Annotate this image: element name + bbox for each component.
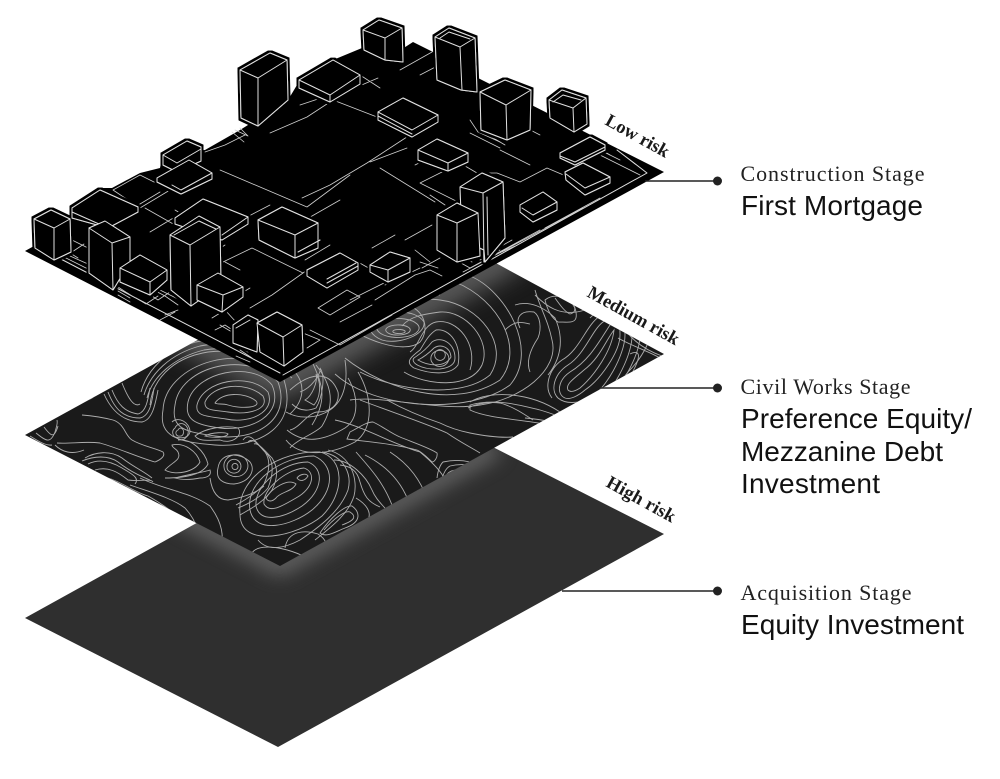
fine street details bbox=[60, 128, 515, 362]
text block: civil works stage: Mezzanine Debt bbox=[741, 436, 943, 467]
panel: low risk construction layer, city model bbox=[25, 20, 664, 382]
tower: small right bbox=[549, 90, 587, 132]
leader line: civil works stage bbox=[600, 384, 722, 392]
label: high risk: High risk bbox=[603, 473, 679, 528]
block: center block bbox=[258, 207, 320, 258]
block: far left slab bbox=[72, 190, 138, 228]
block: small cube center bbox=[197, 273, 243, 312]
panel: medium risk civil works layer bbox=[25, 264, 664, 566]
text block: construction stage: Construction Stage bbox=[740, 161, 924, 186]
text block: acquisition stage: Acquisition Stage bbox=[740, 580, 912, 605]
text block: construction stage bbox=[740, 161, 924, 221]
base plate and back silhouette bbox=[25, 42, 664, 382]
tower: back bbox=[363, 20, 403, 62]
block: left slab bbox=[157, 160, 212, 194]
tower: right cluster front bbox=[437, 203, 480, 262]
block: back slab bbox=[299, 60, 360, 102]
block: left small bbox=[163, 141, 201, 172]
topographic contour lines bbox=[30, 276, 662, 555]
block: center cube bbox=[418, 139, 468, 171]
block: low right front bbox=[370, 252, 410, 282]
tower: far left small bbox=[34, 210, 71, 260]
text block: acquisition stage: Equity Investment bbox=[741, 609, 964, 640]
tower: tall back bbox=[435, 28, 477, 92]
label: low risk: Low risk bbox=[602, 111, 673, 163]
text block: civil works stage: Civil Works Stage bbox=[740, 374, 910, 399]
panel: high risk acquisition layer bbox=[25, 448, 664, 747]
leader line: construction stage bbox=[645, 176, 722, 186]
block: far right bbox=[520, 192, 557, 222]
tower: front corner cube bbox=[257, 312, 303, 366]
block: center slab bbox=[378, 98, 438, 137]
block: low center left bbox=[120, 255, 167, 295]
text block: civil works stage: Preference Equity/ bbox=[741, 403, 972, 434]
text block: construction stage: First Mortgage bbox=[741, 190, 923, 221]
tower: mid right bbox=[480, 80, 531, 140]
block: far right slab bbox=[560, 137, 605, 165]
plate edge highlights bbox=[57, 150, 647, 375]
tower: center left tall bbox=[170, 216, 221, 306]
label: medium risk: Medium risk bbox=[584, 283, 683, 350]
text block: civil works stage bbox=[740, 374, 972, 499]
leader line: acquisition stage bbox=[562, 586, 722, 596]
tower: right cluster rear bbox=[460, 173, 505, 262]
street lines bbox=[60, 52, 640, 362]
text block: acquisition stage bbox=[740, 580, 964, 640]
block: right slab bbox=[307, 253, 358, 288]
tower: back left bbox=[240, 53, 288, 126]
tower: left front bbox=[89, 221, 130, 290]
building blocks bbox=[34, 20, 610, 366]
block: right low bbox=[565, 163, 610, 195]
block: left center slab bbox=[175, 199, 248, 240]
block: front left low cube bbox=[233, 315, 258, 352]
text block: civil works stage: Investment bbox=[741, 468, 880, 499]
